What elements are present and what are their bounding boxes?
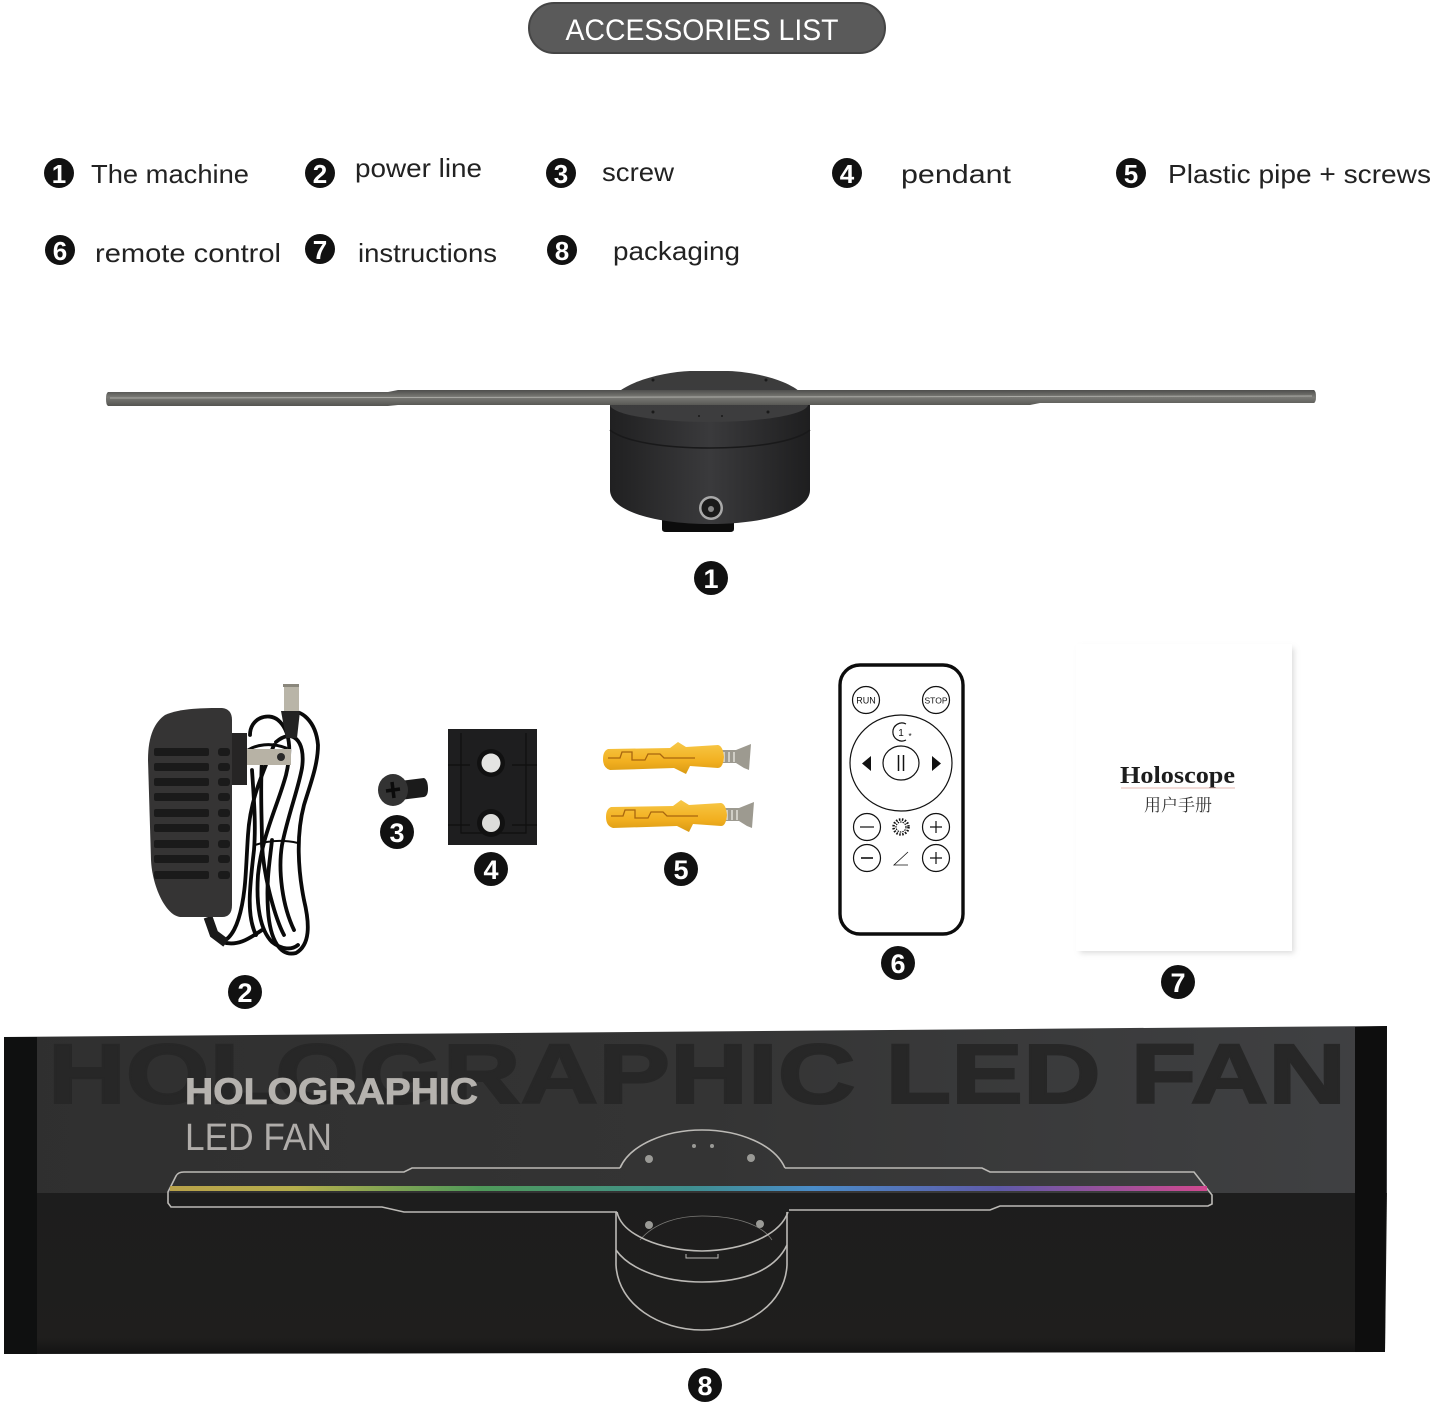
RUN button: [852, 686, 880, 714]
number badge 7: 7: [1170, 968, 1186, 998]
title pill: [529, 3, 885, 53]
product: power adapter: [148, 684, 318, 954]
adapter body: [148, 708, 232, 917]
number badge 8: [688, 1368, 722, 1402]
fan blade: [106, 390, 1316, 406]
remote outline: [840, 665, 963, 934]
DC plug: [281, 684, 300, 738]
power socket: [699, 496, 723, 520]
number badge 4: 4: [483, 855, 499, 885]
product: remote control: [840, 665, 963, 934]
fan line drawing: [168, 1130, 1212, 1330]
manual subtitle: 用户手册: [1144, 796, 1212, 815]
legend item 3: 3: [554, 159, 568, 189]
number badge 7: [1161, 965, 1195, 999]
legend item 6: [45, 235, 281, 268]
number badge 6: [881, 946, 915, 980]
directional ring: 1: [898, 728, 904, 739]
legend item 7: instructions: [358, 238, 497, 268]
top disc: [610, 371, 808, 422]
box edge strips: [4, 1026, 1387, 1354]
legend item 3: screw: [602, 157, 674, 187]
box upper panel: [4, 1026, 1387, 1193]
RUN button: RUN: [856, 696, 876, 706]
legend item 6: remote control: [95, 238, 281, 268]
legend item 8: 8: [555, 236, 569, 266]
legend item 8: packaging: [613, 236, 740, 266]
legend item 7: [305, 234, 497, 268]
product: plastic pipes and screws: [603, 742, 754, 832]
product: pendant bracket: [448, 729, 537, 845]
legend: item list: [44, 153, 1431, 268]
brightness buttons: [854, 814, 950, 840]
product: LED fan machine: [106, 371, 1316, 532]
legend item 8: [547, 235, 740, 266]
number badge 1: [694, 561, 728, 595]
watermark text: HOLOGRAPHIC LED FAN: [48, 1027, 1346, 1121]
product: packaging box: [4, 1026, 1387, 1354]
number badge 5: 5: [673, 855, 689, 885]
fan screw dots: [645, 1144, 764, 1229]
legend item 5: 5: [1124, 159, 1138, 189]
legend item 1: The machine: [91, 159, 249, 189]
angle buttons: [854, 844, 950, 872]
number badge 6: 6: [890, 949, 906, 979]
number badge 3: [380, 815, 414, 849]
legend item 2: 2: [313, 159, 327, 189]
STOP button: STOP: [924, 696, 948, 706]
anchor upper: [603, 742, 751, 774]
number badge 2: [228, 975, 262, 1009]
strain relief: [208, 917, 226, 943]
cylinder body: [610, 405, 810, 524]
box lower panel: [4, 1193, 1387, 1354]
legend item 3: [546, 157, 674, 189]
number badge 8: 8: [697, 1371, 713, 1401]
base plate: [662, 515, 734, 532]
legend item 7: 7: [313, 235, 327, 265]
STOP button: [922, 686, 950, 714]
legend item 2: power line: [355, 153, 482, 183]
directional ring: [850, 715, 952, 811]
box heading: [185, 1071, 478, 1159]
number badge 5: [664, 852, 698, 886]
product: instruction manual: [1076, 644, 1294, 953]
anchor lower: [606, 800, 754, 832]
product: screw: [378, 774, 428, 806]
title pill: ACCESSORIES LIST: [566, 14, 838, 47]
box heading: HOLOGRAPHIC: [185, 1071, 478, 1112]
plug neck: [232, 733, 247, 785]
plug prong: [247, 749, 291, 765]
number badge 2: 2: [237, 978, 253, 1008]
cable coil: [222, 711, 318, 954]
legend item 4: 4: [840, 159, 855, 189]
legend item 4: [832, 158, 1012, 189]
number badge 1: 1: [703, 564, 719, 594]
legend item 5: Plastic pipe + screws: [1168, 159, 1431, 189]
legend item 2: [305, 153, 482, 189]
number badge 4: [474, 852, 508, 886]
rainbow light strip: [170, 1186, 1207, 1191]
manual title: Holoscope: [1120, 763, 1235, 789]
screw holes: [652, 378, 770, 417]
legend item 4: pendant: [901, 159, 1012, 189]
directional ring: *: [908, 732, 912, 741]
vent slots: [154, 748, 230, 879]
number badge 3: 3: [389, 818, 405, 848]
box heading: LED FAN: [185, 1117, 332, 1159]
legend item 1: 1: [52, 159, 66, 189]
legend item 6: 6: [53, 236, 67, 266]
